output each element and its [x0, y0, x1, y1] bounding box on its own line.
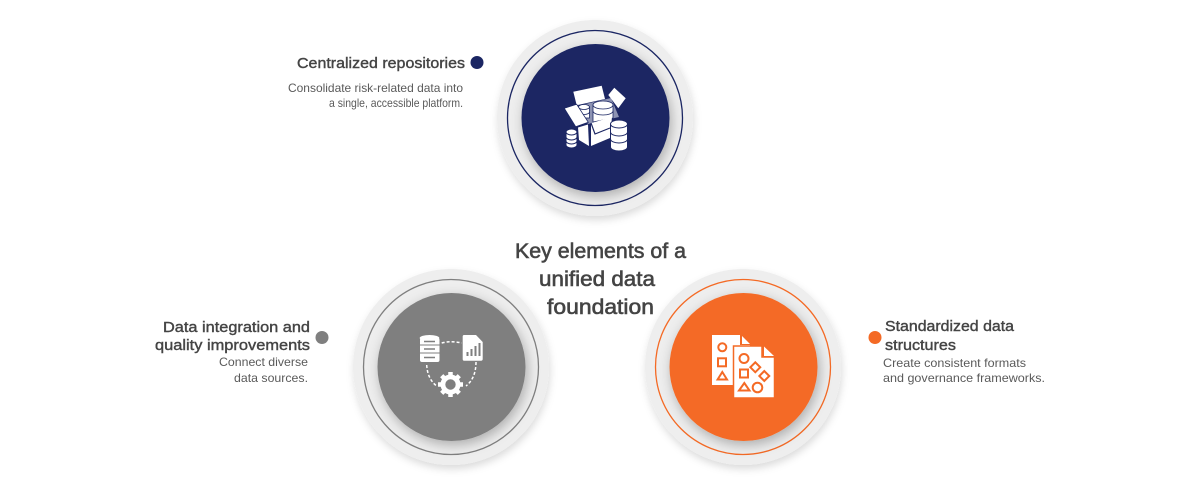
marker: orange dot: [868, 331, 882, 344]
panel: centralized repositories circle: [497, 20, 693, 216]
text block: standardized data: [883, 318, 1045, 385]
text block: centralized repositories: Centralized repositories: [297, 55, 465, 72]
text block: centralized repositories: [288, 55, 465, 110]
icon: documents with shapes: [712, 335, 774, 398]
text block: centralized repositories: Consolidate risk-related data into: [288, 81, 463, 95]
text block: data integration: Connect diverse: [219, 355, 308, 369]
text block: data integration: Data integration and: [163, 319, 310, 336]
text block: standardized data: and governance frameworks.: [883, 371, 1045, 385]
text block: standardized data: structures: [885, 337, 956, 354]
title: unified data: [539, 268, 655, 291]
panel: standardized data circle: [645, 269, 841, 465]
marker: gray dot: [316, 331, 328, 344]
icon: box of databases: [564, 86, 628, 151]
title: foundation: [547, 296, 654, 319]
text block: standardized data: Standardized data: [885, 318, 1015, 335]
icon: data, report and gear cycle: [420, 335, 483, 397]
text block: centralized repositories: a single, accessible platform.: [329, 96, 463, 110]
text block: data integration: data sources.: [234, 371, 308, 385]
panel: data integration circle: [353, 269, 549, 465]
title: Key elements of a: [515, 240, 686, 263]
text block: data integration: quality improvements: [155, 337, 310, 354]
marker: navy dot: [470, 56, 484, 69]
text block: standardized data: Create consistent formats: [883, 356, 1026, 370]
icon: gear: [438, 372, 463, 397]
title: [515, 240, 686, 319]
text block: data integration: [155, 319, 310, 385]
